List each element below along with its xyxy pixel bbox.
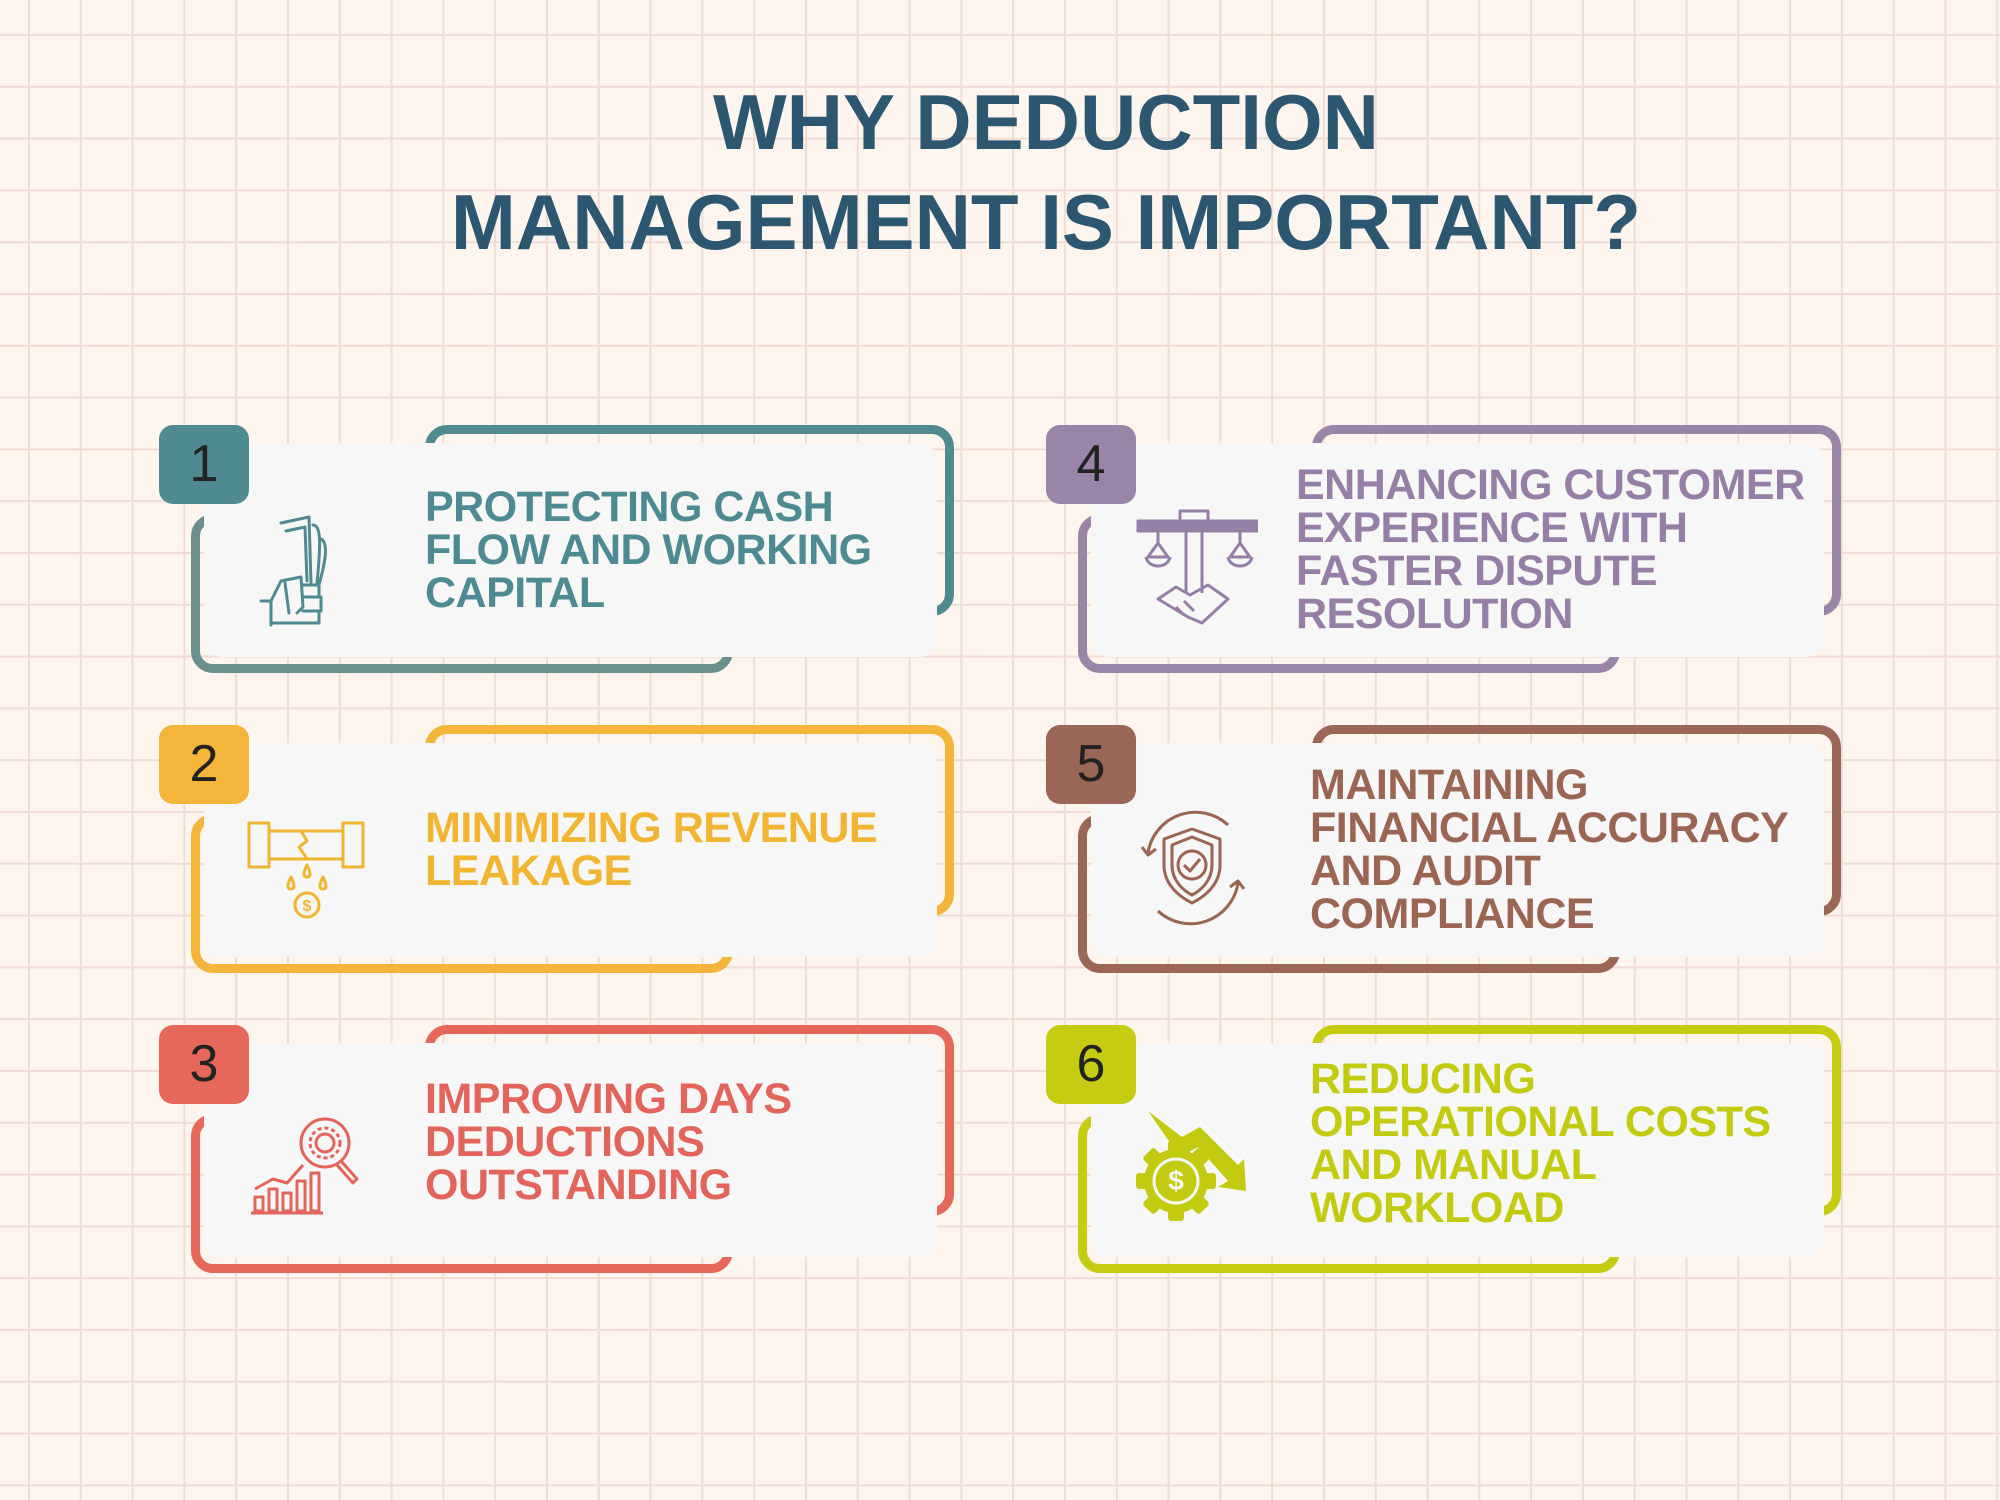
card 1: protecting cash flow — [159, 425, 954, 673]
text 3: IMPROVING DAYS — [425, 1074, 792, 1122]
title: MANAGEMENT IS IMPORTANT? — [451, 178, 1641, 266]
badge 5: 5 — [1077, 735, 1105, 793]
badge 3: 3 — [190, 1035, 218, 1093]
text 3: DEDUCTIONS — [425, 1118, 704, 1166]
text 3 — [425, 1074, 792, 1208]
text 5: FINANCIAL ACCURACY — [1310, 804, 1788, 852]
badge 6: 6 — [1077, 1035, 1105, 1093]
card 6: operational costs — [1046, 1025, 1841, 1273]
text 5: COMPLIANCE — [1310, 890, 1594, 938]
text 6: OPERATIONAL COSTS — [1310, 1098, 1771, 1146]
icon: leaking pipe: $ — [303, 898, 312, 915]
text 3: OUTSTANDING — [425, 1160, 732, 1208]
text 4: FASTER DISPUTE — [1296, 547, 1657, 595]
text 2: LEAKAGE — [425, 847, 632, 895]
icon: leaking pipe — [248, 822, 364, 918]
icon: shield with check — [1140, 810, 1246, 926]
badge 5 — [1046, 725, 1136, 804]
text 5: MAINTAINING — [1310, 761, 1588, 809]
text 4: ENHANCING CUSTOMER — [1296, 461, 1805, 509]
text 1: FLOW AND WORKING — [425, 526, 872, 574]
card 4: customer experience — [1046, 425, 1841, 673]
text 4: RESOLUTION — [1296, 590, 1573, 638]
text 1: PROTECTING CASH — [425, 482, 833, 530]
text 6 — [1310, 1055, 1771, 1232]
title — [451, 78, 1641, 266]
badge 2 — [159, 725, 249, 804]
text 5: AND AUDIT — [1310, 847, 1540, 895]
icon: chart with magnifier — [251, 1118, 358, 1214]
text 5 — [1310, 761, 1788, 938]
text 4 — [1296, 461, 1805, 638]
text 2: MINIMIZING REVENUE — [425, 804, 877, 852]
badge 3 — [159, 1025, 249, 1104]
text 6: REDUCING — [1310, 1055, 1535, 1103]
text 6: WORKLOAD — [1310, 1184, 1564, 1232]
text 1 — [425, 482, 872, 616]
text 2 — [425, 804, 877, 895]
badge 1: 1 — [190, 435, 218, 493]
badge 4 — [1046, 425, 1136, 504]
icon: hand with cash — [260, 516, 327, 626]
text 1: CAPITAL — [425, 568, 605, 616]
card 5: financial accuracy — [1046, 725, 1841, 973]
badge 2: 2 — [190, 735, 218, 793]
title: WHY DEDUCTION — [713, 78, 1379, 166]
text 4: EXPERIENCE WITH — [1296, 504, 1688, 552]
badge 4: 4 — [1077, 435, 1105, 493]
text 6: AND MANUAL — [1310, 1141, 1596, 1189]
badge 1 — [159, 425, 249, 504]
card 2: revenue leakage — [159, 725, 954, 973]
icon: gear with dollar and down arrow — [1136, 1111, 1246, 1221]
card 3: days deductions outstanding — [159, 1025, 954, 1273]
icon: scales with handshake — [1136, 510, 1258, 624]
badge 6 — [1046, 1025, 1136, 1104]
icon: gear with dollar and down arrow: $ — [1168, 1165, 1184, 1196]
